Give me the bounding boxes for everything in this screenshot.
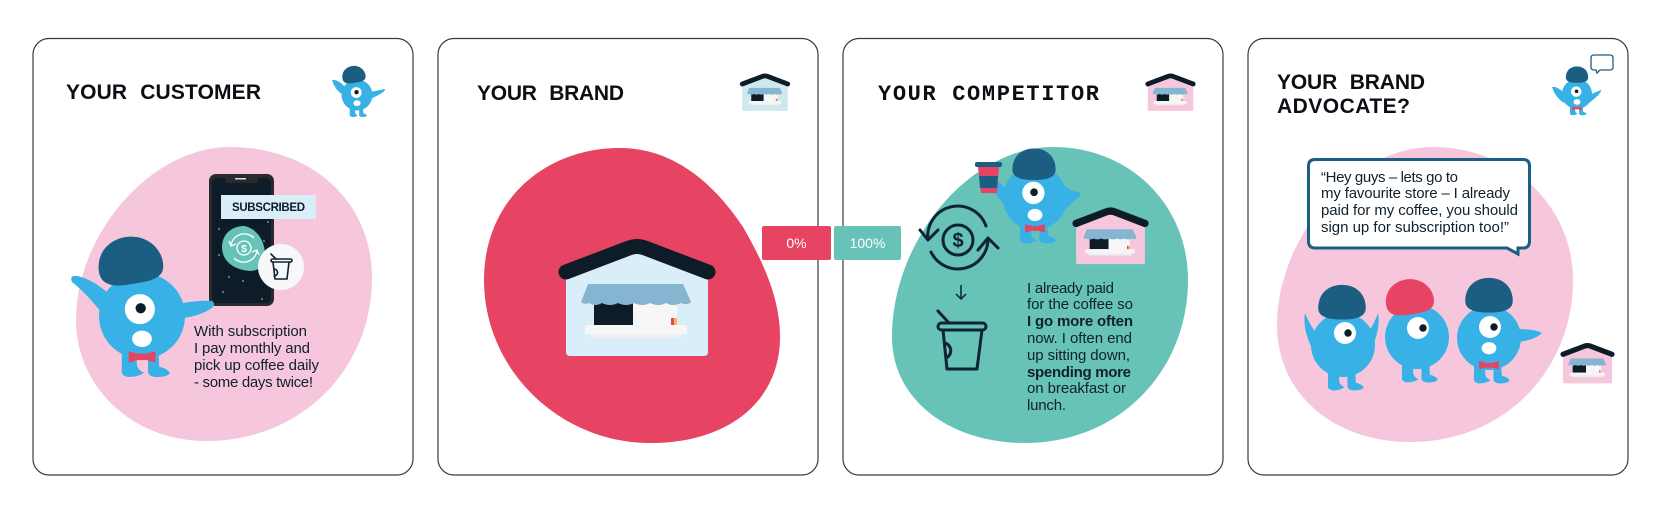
icon: subscription cycle	[920, 206, 998, 269]
heading: your brand advocate	[1277, 71, 1425, 118]
icon: shop beside group	[1563, 345, 1612, 383]
text: subscription	[194, 323, 320, 391]
callout: speech bubble	[1308, 160, 1530, 254]
icon: small competitor shop	[1148, 75, 1193, 111]
heading: your brand: YOUR BRAND	[477, 82, 624, 105]
text: competitor story: on breakfast or	[1027, 380, 1126, 397]
text: competitor story: now. I often end	[1027, 330, 1132, 347]
text: competitor story: I already paid	[1027, 280, 1114, 297]
character: advocate pointing	[1457, 278, 1542, 383]
text: competitor story: lunch.	[1027, 397, 1066, 414]
panel: your brand advocate	[1248, 38, 1628, 475]
background blob: pink	[76, 147, 372, 441]
icon: subscription cycle on phone: $	[241, 244, 247, 255]
heading: your customer: YOUR CUSTOMER	[66, 81, 261, 104]
text: competitor story	[1027, 280, 1133, 414]
icon: takeaway cup	[975, 162, 1002, 193]
background blob: red	[484, 148, 780, 443]
text: subscription: - some days twice!	[194, 374, 313, 391]
callout: speech bubble: my favourite store – I already	[1321, 185, 1510, 202]
icon: small brand shop	[742, 75, 788, 111]
arrow: down	[956, 285, 966, 299]
icon: coffee cup	[938, 311, 986, 369]
text: competitor story: up sitting down,	[1027, 347, 1130, 364]
callout: speech bubble: paid for my coffee, you should	[1321, 202, 1518, 219]
icon: small customer character	[332, 66, 385, 117]
text: competitor story: I go more often	[1027, 313, 1133, 330]
icon: competitor shop	[1076, 210, 1145, 264]
character: customer with takeaway coffee	[975, 148, 1080, 243]
icon: large brand shop	[566, 245, 708, 356]
text: subscription: With subscription	[194, 323, 307, 340]
character: customer holding phone	[71, 237, 214, 377]
callout: speech bubble: sign up for subscription too!”	[1321, 219, 1509, 236]
character: friend with red hat	[1385, 279, 1449, 382]
label: 0%	[762, 226, 831, 260]
text: dollar: $	[952, 230, 964, 252]
icon: small advocate with speech bubble	[1552, 55, 1613, 115]
label: subscribed: SUBSCRIBED	[232, 202, 305, 214]
character: friend with raised arms	[1304, 285, 1379, 390]
text: competitor story: for the coffee so	[1027, 296, 1133, 313]
heading: your brand advocate: YOUR BRAND	[1277, 71, 1425, 94]
callout: speech bubble: “Hey guys – lets go to	[1321, 169, 1458, 186]
panel: your brand	[438, 38, 818, 475]
text: subscription: I pay monthly and	[194, 340, 310, 357]
phone with subscription	[209, 174, 316, 306]
label: 100%: 100%	[850, 235, 885, 251]
label: 0%: 0%	[786, 235, 807, 251]
panel: your customer	[33, 38, 413, 475]
background blob: teal	[892, 147, 1188, 443]
panel: your competitor	[843, 38, 1223, 475]
background blob: pink	[1277, 147, 1573, 442]
text: competitor story: spending more	[1027, 364, 1131, 381]
heading: your brand advocate: ADVOCATE?	[1277, 95, 1410, 118]
icon: coffee cup in white circle	[258, 244, 304, 290]
text: subscription: pick up coffee daily	[194, 357, 320, 374]
heading: your competitor: YOUR COMPETITOR	[878, 82, 1100, 107]
label: 100%	[834, 226, 901, 260]
